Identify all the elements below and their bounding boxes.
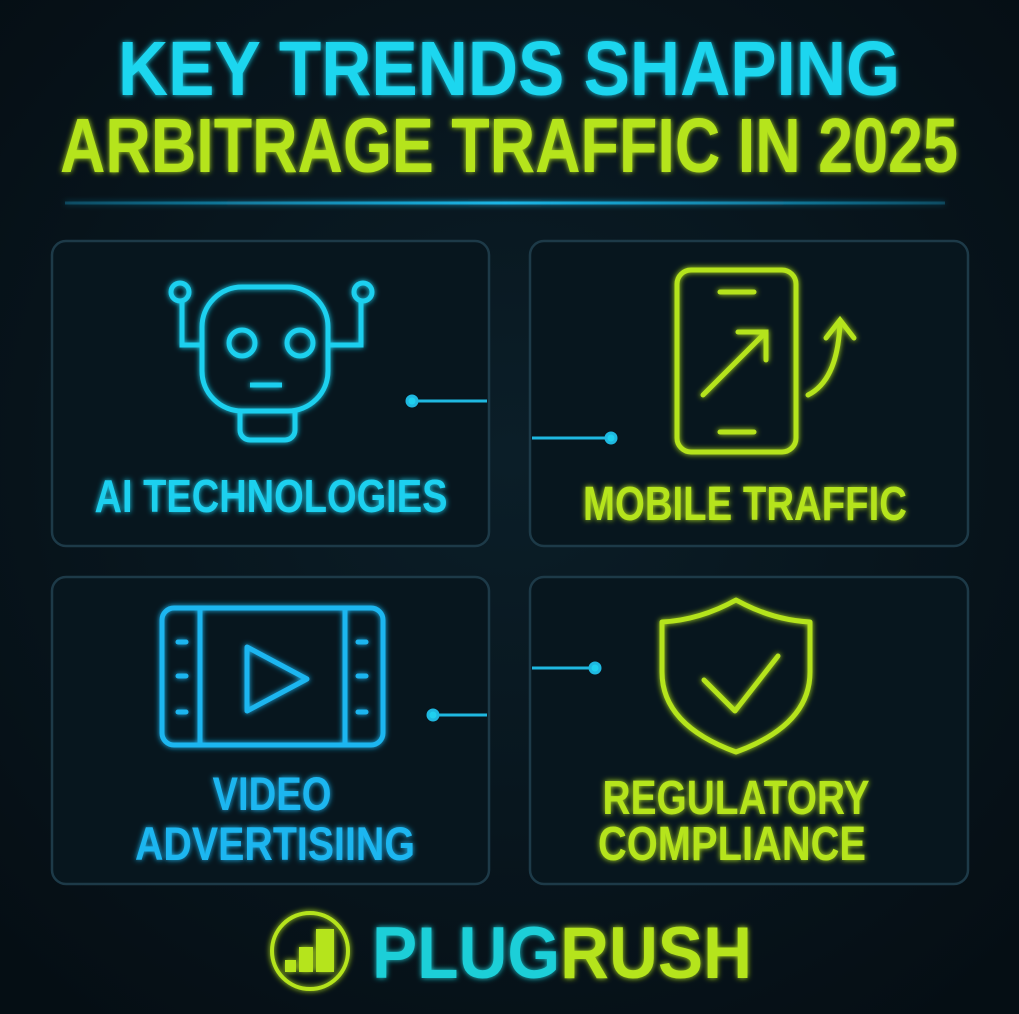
icon: robot xyxy=(171,283,372,440)
panel: AI technologies xyxy=(52,241,489,546)
label: MOBILE TRAFFIC xyxy=(583,478,907,531)
connector xyxy=(407,396,487,406)
connector xyxy=(532,433,616,443)
icon: video xyxy=(162,608,383,745)
connector xyxy=(428,710,487,720)
label: REGULATORY xyxy=(602,772,870,825)
connector xyxy=(532,663,600,673)
title xyxy=(60,26,958,189)
label: ADVERTISIING xyxy=(135,817,415,870)
icon: shield xyxy=(662,600,810,752)
panel: regulatory compliance xyxy=(530,577,968,884)
panel: video advertising xyxy=(52,577,489,884)
logo: PLUGRUSH xyxy=(372,913,752,994)
icon: logo chart xyxy=(272,913,348,989)
icon: phone xyxy=(677,270,854,452)
label xyxy=(598,772,870,871)
title: KEY TRENDS SHAPING xyxy=(118,26,900,112)
label: COMPLIANCE xyxy=(598,818,866,871)
label xyxy=(135,767,415,870)
label: AI TECHNOLOGIES xyxy=(94,470,448,522)
panel: mobile traffic xyxy=(530,241,968,546)
label: VIDEO xyxy=(212,767,332,820)
